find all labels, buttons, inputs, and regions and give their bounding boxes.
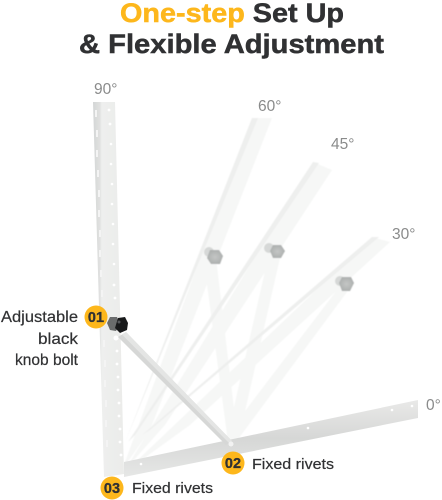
angle labels xyxy=(94,81,441,414)
badge 02: 02 xyxy=(225,456,241,472)
icon: black knob bolt xyxy=(107,317,128,333)
angle labels: 60° xyxy=(258,98,281,115)
title xyxy=(79,0,384,59)
badge 01: 01 xyxy=(88,310,104,326)
ghost knob bolts xyxy=(204,243,345,286)
badge 02 xyxy=(222,452,244,474)
angle labels: 90° xyxy=(94,81,117,98)
angle labels: 30° xyxy=(392,226,415,243)
label: fixed rivets 02: Fixed rivets xyxy=(252,456,334,473)
label: adjustable black knob bolt: Adjustable xyxy=(1,309,78,326)
horizontal rail at 0 degrees xyxy=(124,400,418,477)
badge 03: 03 xyxy=(104,481,120,497)
label: adjustable black knob bolt: black xyxy=(38,331,78,348)
title: & Flexible Adjustment xyxy=(79,29,384,59)
badge 01 xyxy=(84,306,108,328)
ghost bars: adjustment positions at 60, 45 and 30 degrees xyxy=(122,118,390,472)
badge 03 xyxy=(100,476,124,500)
label: adjustable black knob bolt: knob bolt xyxy=(15,352,79,369)
angle labels: 45° xyxy=(331,136,354,153)
label: adjustable black knob bolt xyxy=(1,309,79,369)
angle labels: 0° xyxy=(426,397,441,414)
diagonal support strut xyxy=(118,332,234,446)
vertical rail at 90 degrees xyxy=(93,102,124,477)
label: fixed rivets 03: Fixed rivets xyxy=(132,480,213,497)
